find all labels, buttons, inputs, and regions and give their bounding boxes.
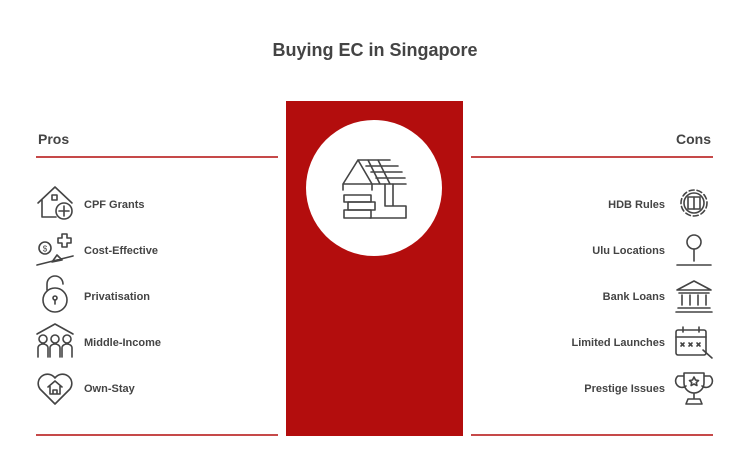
item: CPF Grants [38, 187, 145, 219]
item: Prestige Issues [584, 373, 712, 404]
item: Privatisation: Privatisation [84, 291, 150, 303]
item: Bank Loans [603, 281, 712, 312]
item: Cost-Effective: $ [43, 244, 48, 254]
item: Ulu Locations: Ulu Locations [592, 245, 665, 257]
item: Cost-Effective [37, 234, 158, 265]
item: Prestige Issues: Prestige Issues [584, 383, 665, 395]
item: Privatisation [43, 276, 150, 312]
panel: cons [471, 131, 713, 435]
item: Cost-Effective: Cost-Effective [84, 245, 158, 257]
item: Limited Launches [571, 327, 712, 358]
item: Own-Stay [38, 374, 136, 404]
heading: pros: Pros [38, 131, 69, 147]
panel: pros [36, 131, 278, 435]
item: Ulu Locations [592, 235, 711, 265]
icon: house construction [343, 160, 406, 218]
item: Limited Launches: Limited Launches [571, 337, 665, 349]
title: Buying EC in Singapore [272, 40, 478, 60]
item: Middle-Income [37, 324, 161, 357]
item: CPF Grants: CPF Grants [84, 199, 145, 211]
center red column [286, 101, 463, 436]
item: Middle-Income: Middle-Income [84, 337, 161, 349]
item: HDB Rules: HDB Rules [608, 199, 665, 211]
item: Own-Stay: Own-Stay [84, 383, 136, 395]
heading: cons: Cons [676, 131, 711, 147]
item: HDB Rules [608, 190, 707, 216]
item: Bank Loans: Bank Loans [603, 291, 665, 303]
